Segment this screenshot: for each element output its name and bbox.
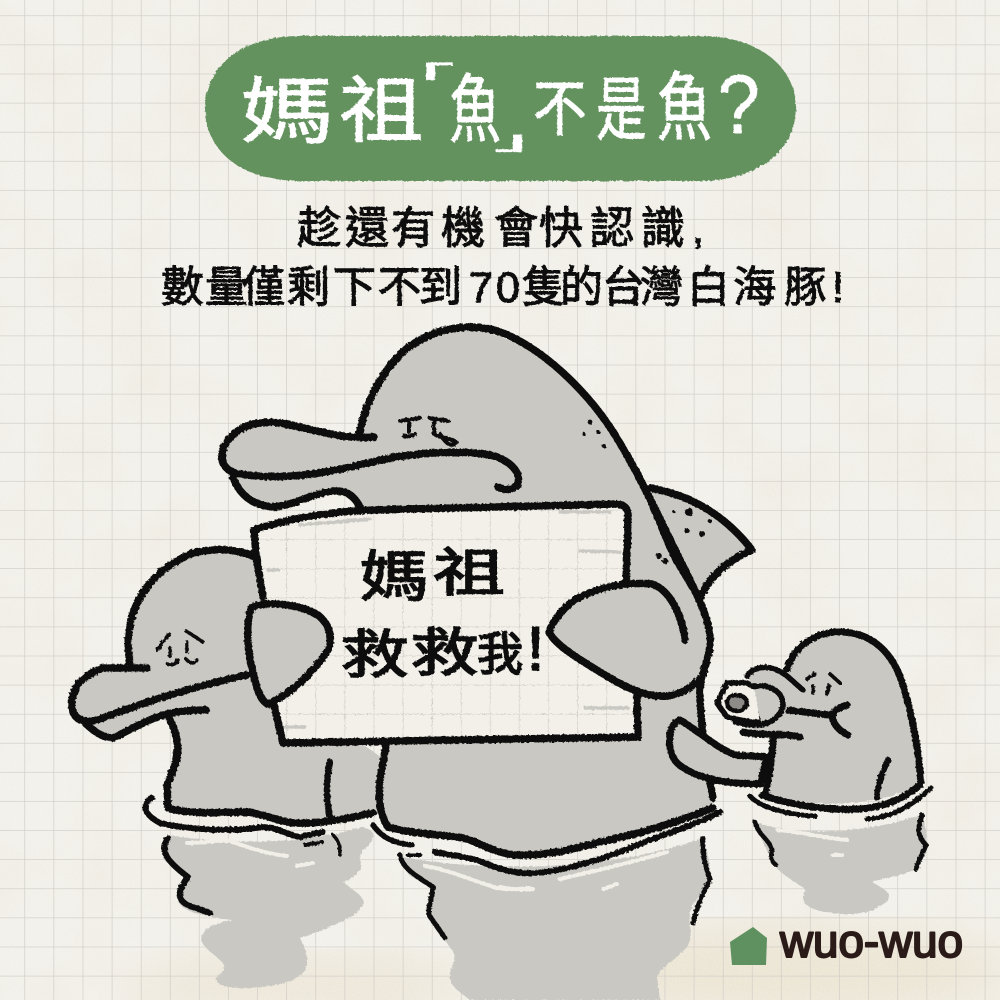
- sign text: [341, 545, 544, 684]
- title text: 不: [533, 76, 587, 144]
- white water highlights: [187, 830, 847, 890]
- subtitle: 趁還有機會快認識,: [297, 204, 704, 253]
- head outline: [359, 327, 713, 798]
- small body: [745, 632, 922, 803]
- title banner: [205, 36, 796, 181]
- left flipper: [248, 604, 330, 704]
- title text: 」: [495, 127, 567, 154]
- sign text: 救: [341, 626, 409, 684]
- sign text: 媽: [360, 547, 429, 608]
- reflection: small dolphin: [755, 815, 927, 914]
- left small dolphin: [72, 550, 385, 823]
- title text: 魚: [449, 68, 501, 152]
- right flipper: [549, 584, 701, 696]
- dorsal fin outline: [650, 488, 752, 598]
- reflection: left dolphin: [163, 827, 374, 988]
- water ripple strokes: [145, 788, 931, 938]
- logo: [730, 915, 963, 967]
- face: left dolphin: [157, 631, 203, 665]
- small right dolphin: [669, 632, 922, 809]
- sign text: 我: [477, 628, 523, 680]
- wordmark: wuo-wuo: [779, 915, 963, 967]
- snout and eye marks: [400, 418, 456, 445]
- sign text: !: [527, 615, 544, 684]
- water reflections: [163, 815, 927, 1000]
- title text: 魚: [657, 67, 712, 150]
- face: small dolphin: [807, 674, 840, 694]
- reflection: big dolphin: [403, 838, 710, 1000]
- big dolphin: [222, 327, 752, 873]
- skin spots: [582, 420, 712, 564]
- title text: 媽: [241, 72, 334, 153]
- camera: [717, 667, 803, 725]
- title text: 祖: [339, 71, 423, 152]
- icon: house: [730, 927, 767, 965]
- title text: ?: [718, 58, 760, 151]
- sign text: 救: [411, 624, 479, 682]
- upper beak: [222, 422, 518, 489]
- reaching flipper: [669, 720, 767, 784]
- dorsal fin: [640, 488, 752, 598]
- subtitle: [161, 204, 844, 312]
- title text: 「: [381, 62, 453, 89]
- lower beak: [233, 478, 360, 507]
- subtitle: 數量僅剩下不到70隻的台灣白海豚!: [161, 264, 844, 312]
- body left and water ring: [379, 745, 713, 855]
- flippers: [248, 584, 701, 704]
- title text: [241, 58, 760, 154]
- sign text: 祖: [433, 545, 505, 603]
- wooden sign: [254, 504, 638, 743]
- title text: 是: [596, 71, 646, 149]
